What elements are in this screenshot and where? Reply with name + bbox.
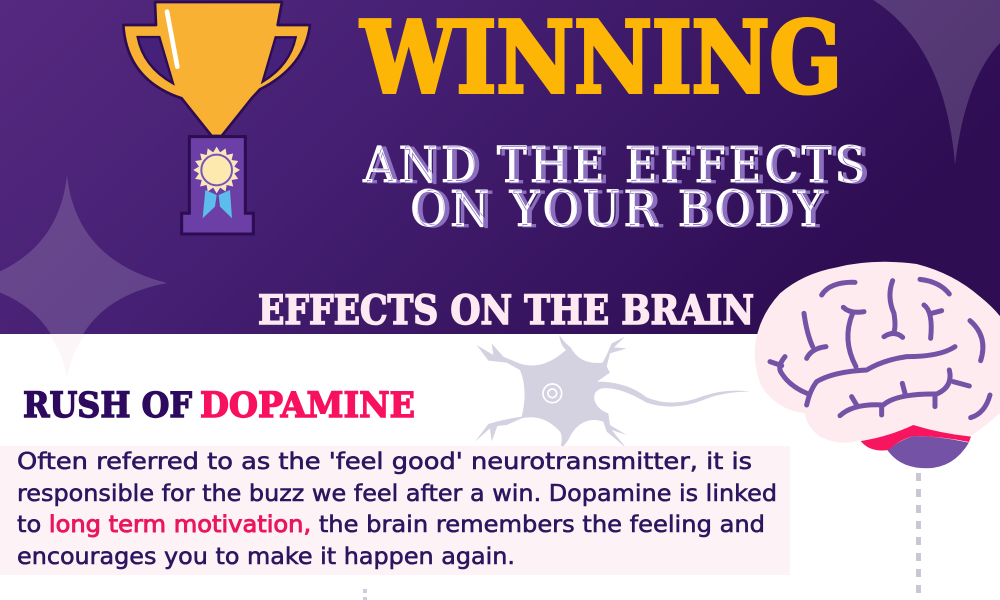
icon: trophy (123, 2, 310, 234)
brain outline (755, 262, 1000, 443)
brain red band (861, 425, 971, 450)
subtitle: line two: ON YOUR BODY (410, 181, 824, 239)
right handle opening (263, 37, 296, 82)
left handle opening (138, 37, 173, 83)
trophy cup (123, 2, 310, 136)
body line one: Often referred to as the 'feel good' neurotransmitter, it is (17, 449, 752, 475)
heading: rush of dopamine (23, 385, 415, 426)
panel: purple header (0, 0, 1000, 334)
connector: dotted line from brain (916, 473, 921, 600)
cup highlight (167, 12, 177, 67)
rosette ribbons (203, 190, 232, 218)
connector: dotted line from text (363, 589, 367, 600)
body line three: to long term motivation, the brain remembers the feeling and (17, 512, 765, 538)
icon: brain (755, 262, 1000, 468)
heading: rush of dopamine: RUSH OF (23, 385, 192, 426)
heading: rush of dopamine: DOPAMINE (200, 385, 415, 426)
subtitle: line one: AND THE EFFECTS (362, 137, 865, 195)
panel: dopamine text (0, 446, 790, 575)
brain stem (887, 436, 969, 468)
decorative star: left (0, 176, 166, 334)
rosette (193, 147, 240, 193)
body line two: responsible for the buzz we feel after a win. Dopamine is linked (17, 481, 777, 507)
trophy base (182, 137, 253, 234)
icon: neuron (475, 335, 750, 450)
title: winning: WINNING (360, 1, 842, 116)
body line four: encourages you to make it happen again. (17, 544, 515, 570)
brain folds (770, 279, 990, 418)
faint star tail below header (48, 334, 86, 378)
decorative star: top right (865, 0, 1000, 165)
heading: effects on the brain: EFFECTS ON THE BRAIN (258, 287, 754, 334)
